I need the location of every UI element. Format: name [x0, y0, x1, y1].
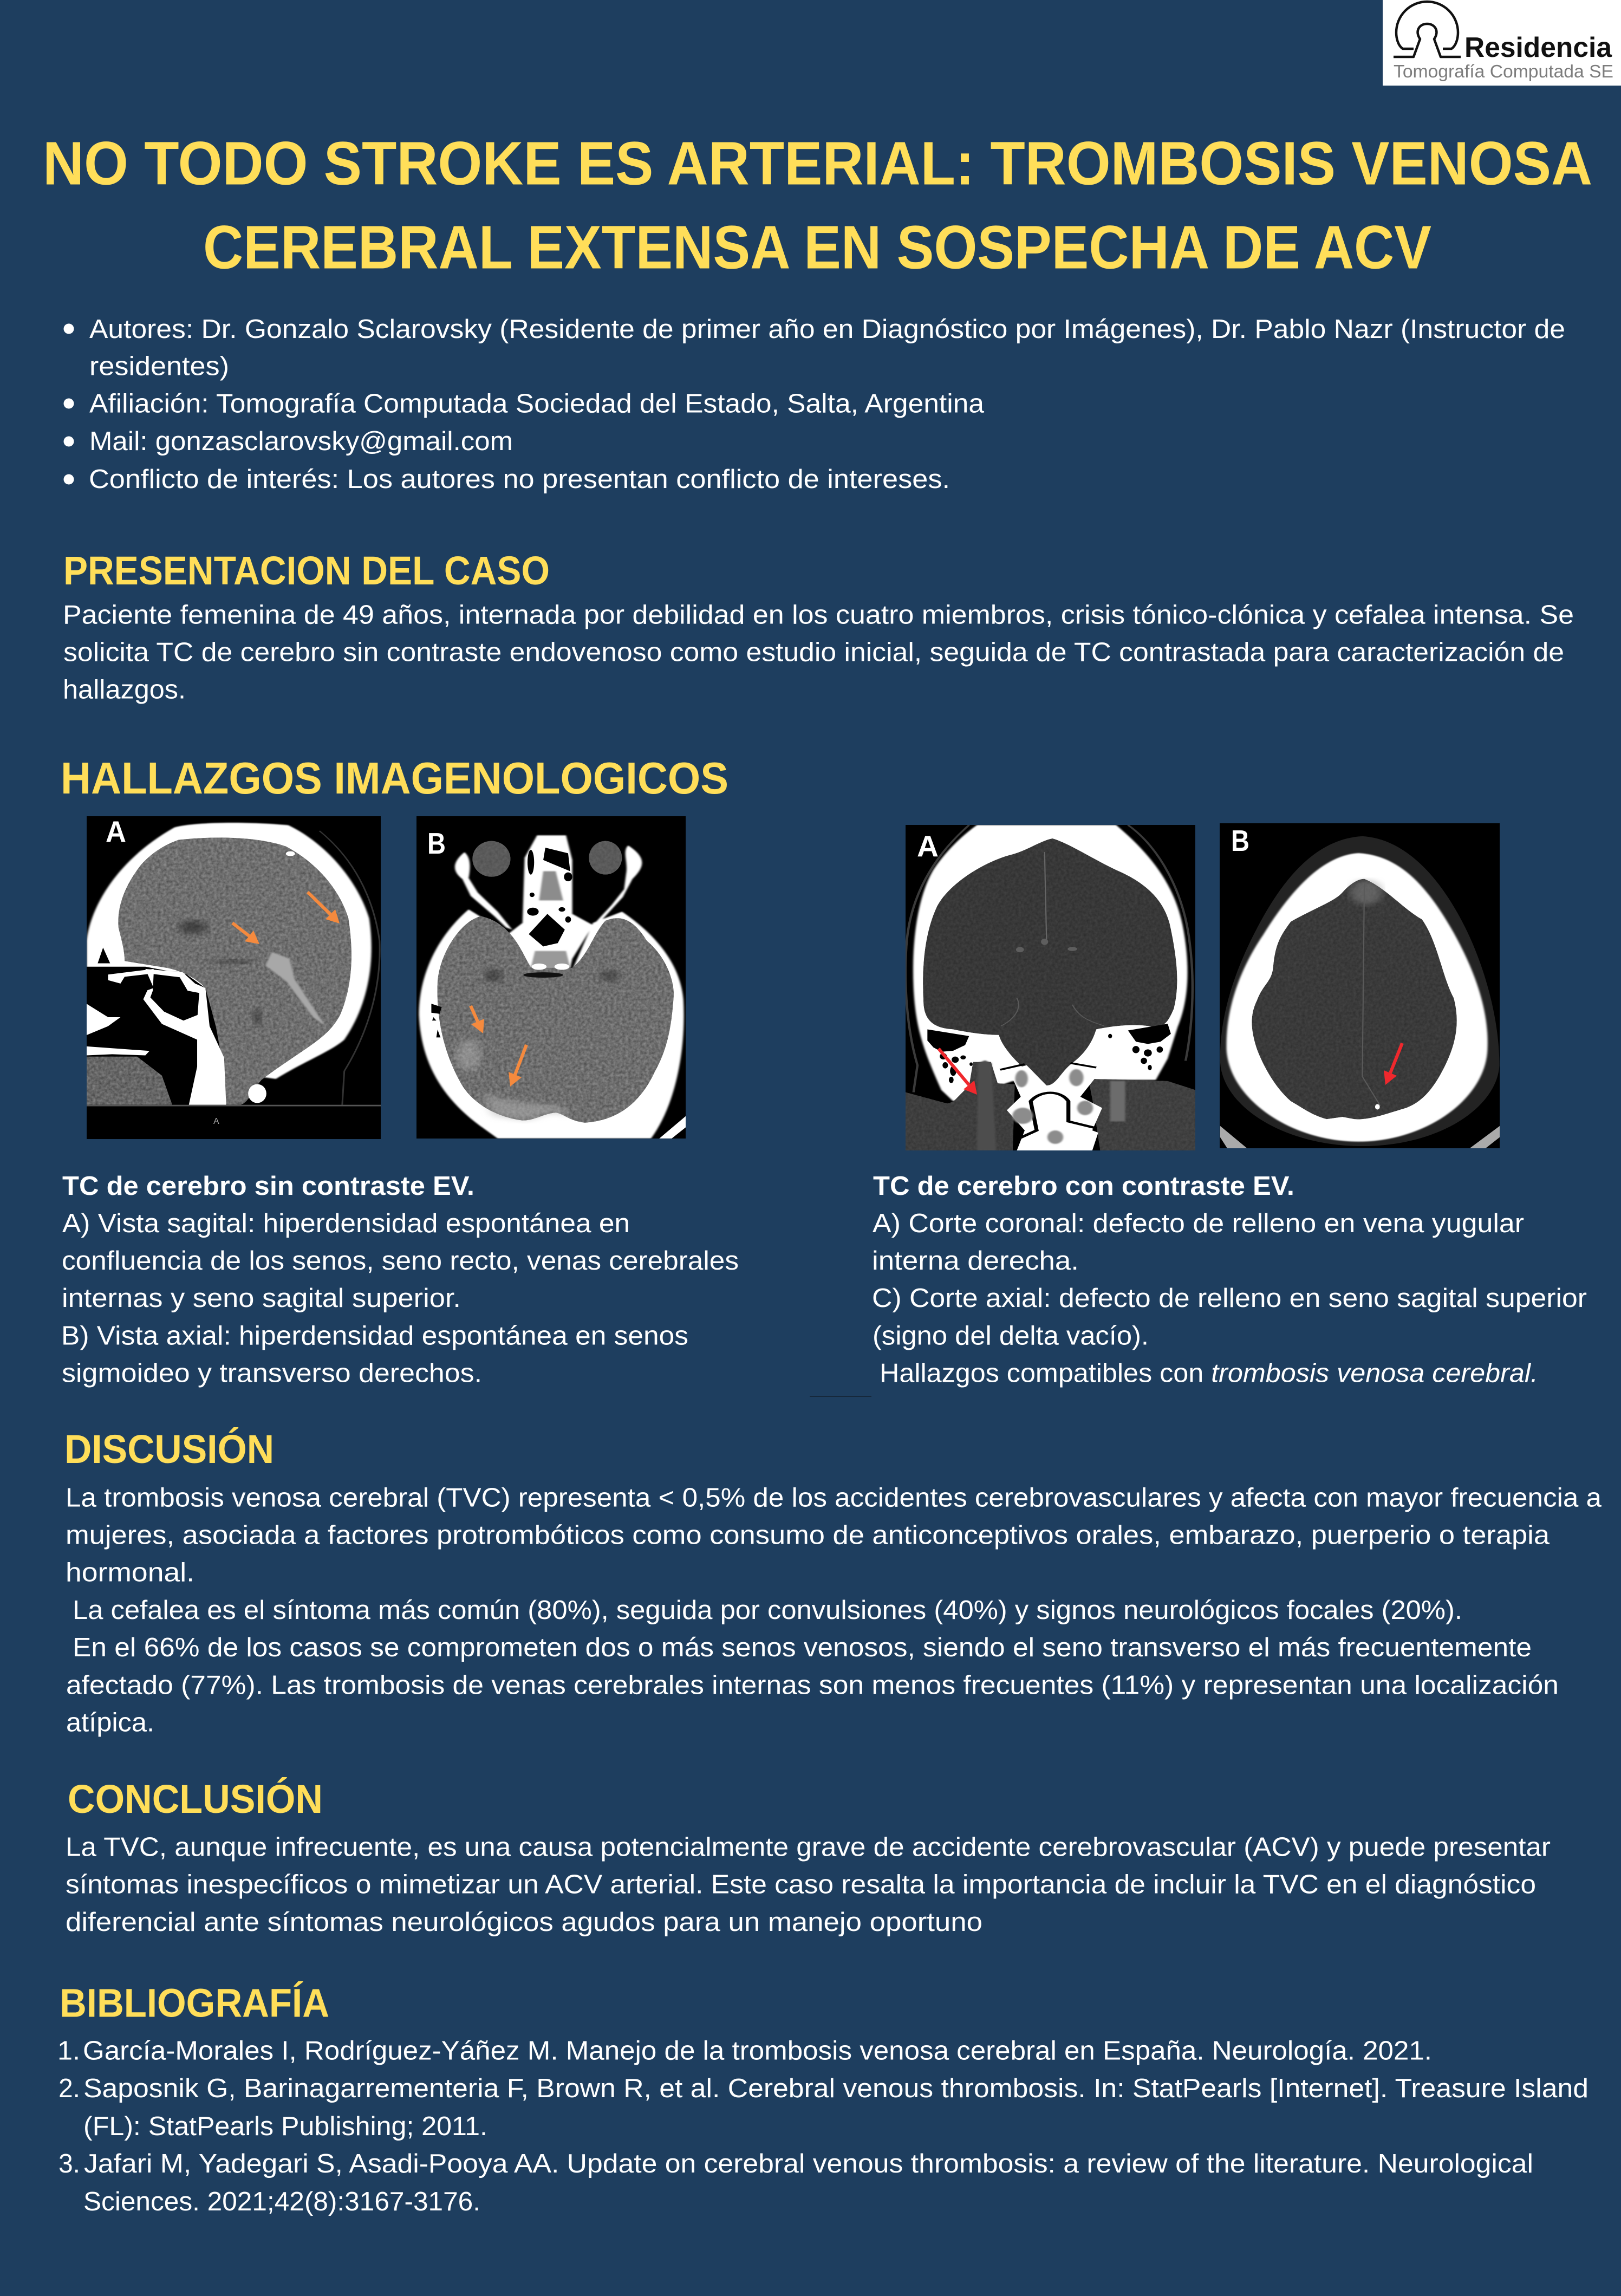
text block: discussion: En el 66% de los casos se comprometen dos o más senos venosos, siendo el seno transverso el más frecuentemente: [73, 1632, 1532, 1662]
arrow: red: [1384, 1043, 1402, 1085]
icon: CT scanner arch: [1394, 2, 1461, 57]
text block: conclusion: diferencial ante síntomas neurológicos agudos para un manejo oportuno: [66, 1907, 982, 1937]
arrow: orange: [509, 1045, 526, 1087]
caption: TC con contraste: Hallazgos compatibles con trombosis venosa cerebral.: [880, 1358, 1538, 1388]
text block: discussion: La trombosis venosa cerebral (TVC) representa < 0,5% de los accidentes cerebrovasculares y afecta con mayor frecuencia a: [66, 1483, 1602, 1512]
panel: CT sagittal A: A: [213, 1117, 219, 1126]
text block: case presentation: [63, 600, 1574, 704]
text block: discussion: mujeres, asociada a factores protrombóticos como consumo de anticonceptivos orales, embarazo, puerperio o terapia: [66, 1520, 1550, 1550]
caption: TC con contraste: [872, 1171, 1587, 1388]
authors list: Mail: gonzasclarovsky@gmail.com: [89, 426, 513, 456]
text block: conclusion: síntomas inespecíficos o mimetizar un ACV arterial. Este caso resalta la importancia de incluir la TVC en el diagnóstico: [66, 1870, 1536, 1899]
caption: TC con contraste: A) Corte coronal: defecto de relleno en vena yugular: [873, 1208, 1524, 1238]
authors list: Afiliación: Tomografía Computada Sociedad del Estado, Salta, Argentina: [89, 389, 984, 418]
references list: 1.: [57, 2035, 80, 2066]
logo wordmark: Residencia: [1464, 32, 1612, 63]
label A: A: [917, 829, 939, 863]
text block: conclusion: [66, 1832, 1551, 1937]
text block: discussion: atípica.: [66, 1707, 154, 1738]
caption: TC sin contraste: B) Vista axial: hiperdensidad espontánea en senos: [61, 1321, 688, 1351]
panel: CT sagittal A: [87, 815, 381, 1139]
heading: conclusion: CONCLUSIÓN: [68, 1777, 323, 1822]
arrow: orange: [232, 923, 259, 944]
references list: 2.: [58, 2073, 80, 2103]
heading: bibliografia: BIBLIOGRAFÍA: [60, 1980, 329, 2026]
heading: discusion: DISCUSIÓN: [64, 1427, 274, 1472]
heading: presentacion del caso: PRESENTACION DEL CASO: [63, 548, 550, 593]
caption: TC sin contraste: [61, 1171, 739, 1388]
caption: TC sin contraste: confluencia de los senos, seno recto, venas cerebrales: [62, 1246, 739, 1276]
text block: case presentation: solicita TC de cerebro sin contraste endovenoso como estudio inicial, seguida de TC contrastada para caracterización de: [63, 637, 1564, 667]
caption: TC con contraste: (signo del delta vacío).: [873, 1321, 1149, 1351]
caption: TC con contraste: TC de cerebro con contraste EV.: [873, 1171, 1294, 1201]
title: CEREBRAL EXTENSA EN SOSPECHA DE ACV: [203, 213, 1431, 282]
authors list: [64, 314, 1565, 494]
logo subtitle: Tomografía Computada SE: [1394, 61, 1613, 81]
authors list: Conflicto de interés: Los autores no presentan conflicto de intereses.: [89, 464, 950, 494]
caption: TC sin contraste: internas y seno sagital superior.: [62, 1283, 461, 1313]
text block: conclusion: La TVC, aunque infrecuente, es una causa potencialmente grave de accidente cerebrovascular (ACV) y puede presentar: [66, 1832, 1551, 1862]
caption: TC sin contraste: TC de cerebro sin contraste EV.: [62, 1171, 474, 1201]
panel: CT axial B with contrast: [1220, 823, 1500, 1148]
title: [43, 129, 1592, 282]
panel: CT coronal A with contrast: [906, 825, 1195, 1150]
references list: (FL): StatPearls Publishing; 2011.: [83, 2111, 487, 2141]
text block: discussion: afectado (77%). Las trombosis de venas cerebrales internas son menos frecuentes (11%) y representan una localización: [66, 1670, 1559, 1700]
text block: discussion: La cefalea es el síntoma más común (80%), seguida por convulsiones (40%) y signos neurológicos focales (20%).: [73, 1595, 1462, 1625]
references list: 3.: [58, 2149, 80, 2178]
text block: discussion: [66, 1483, 1602, 1738]
references list: Jafari M, Yadegari S, Asadi-Pooya AA. Update on cerebral venous thrombosis: a review of the literature. Neurological: [84, 2149, 1533, 2178]
text block: case presentation: hallazgos.: [63, 675, 186, 704]
references list: Sciences. 2021;42(8):3167-3176.: [83, 2187, 480, 2216]
authors list: Autores: Dr. Gonzalo Sclarovsky (Residente de primer año en Diagnóstico por Imágenes), Dr. Pablo Nazr (Instructor de: [89, 314, 1565, 344]
text block: discussion: hormonal.: [66, 1558, 194, 1587]
caption: TC con contraste: C) Corte axial: defecto de relleno en seno sagital superior: [872, 1283, 1587, 1313]
label A: A: [106, 815, 126, 848]
caption: TC sin contraste: sigmoideo y transverso derechos.: [62, 1358, 482, 1388]
caption: TC con contraste: interna derecha.: [872, 1246, 1079, 1276]
logo: Residencia Tomografía Computada SE: [1383, 0, 1621, 86]
authors list: residentes): [89, 351, 229, 381]
heading: hallazgos imagenologicos: HALLAZGOS IMAGENOLOGICOS: [61, 753, 728, 803]
panel: CT axial B: [416, 816, 686, 1139]
references list: Saposnik G, Barinagarrementeria F, Brown R, et al. Cerebral venous thrombosis. In: StatPearls [Internet]. Treasure Island: [83, 2073, 1589, 2103]
references list: García-Morales I, Rodríguez-Yáñez M. Manejo de la trombosis venosa cerebral en España. Neurología. 2021.: [83, 2035, 1432, 2066]
arrow: orange: [308, 892, 340, 923]
arrow: orange: [471, 1006, 484, 1033]
arrow: red: [939, 1049, 977, 1095]
caption: TC sin contraste: A) Vista sagital: hiperdensidad espontánea en: [62, 1208, 630, 1238]
text block: case presentation: Paciente femenina de 49 años, internada por debilidad en los cuatro miembros, crisis tónico-clónica y cefalea intensa. Se: [63, 600, 1574, 629]
references list: [57, 2035, 1589, 2216]
label B: B: [1231, 824, 1249, 857]
label B: B: [427, 827, 446, 860]
